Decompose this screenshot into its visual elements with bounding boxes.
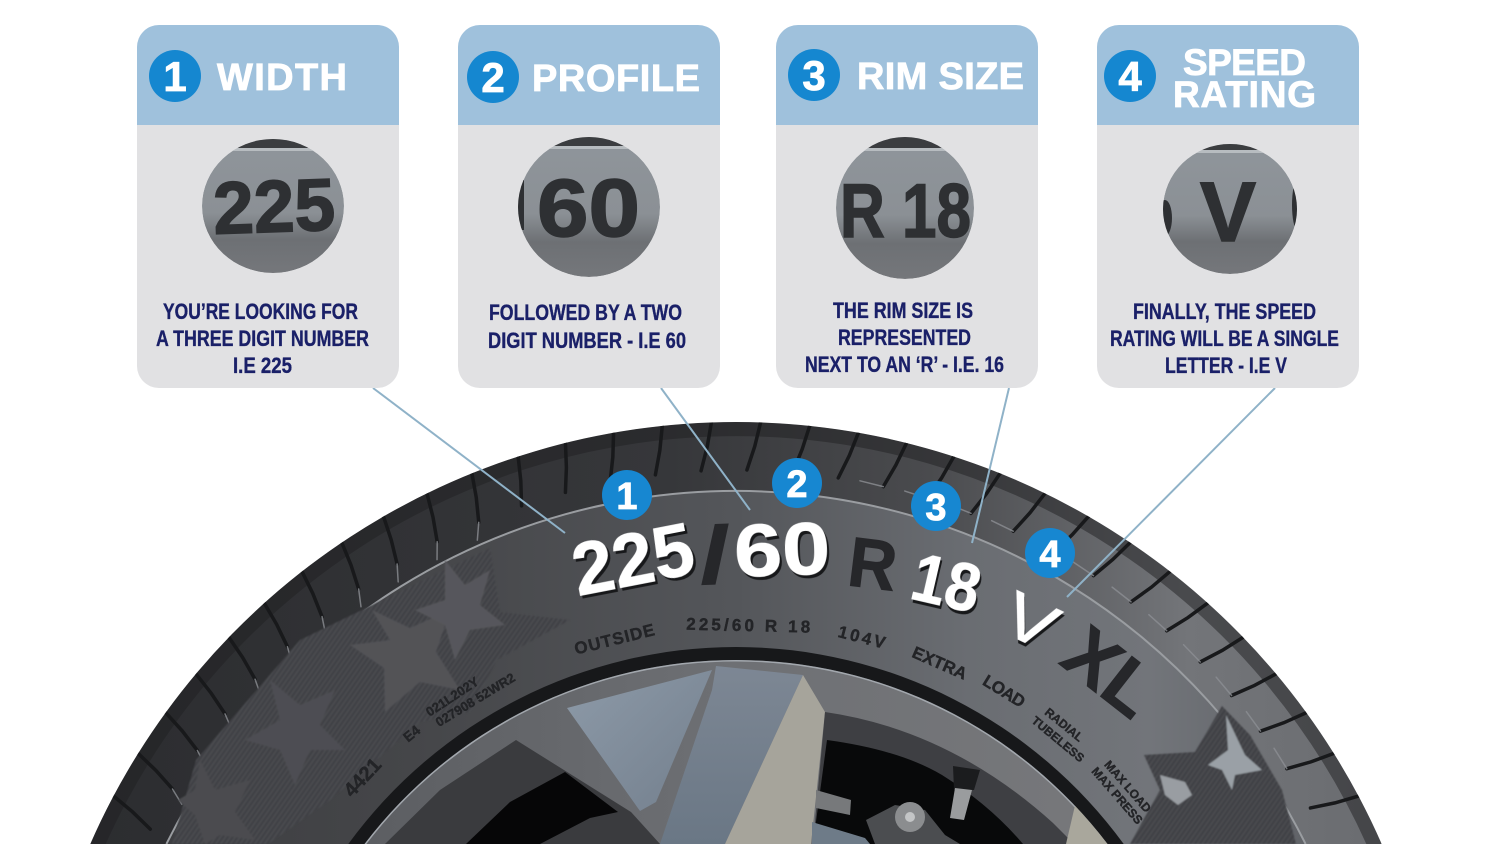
photo: 60: 60 — [537, 163, 640, 254]
panel: width — [137, 25, 399, 388]
number badge 3: 3 — [802, 52, 826, 99]
raised sidewall size markings: V — [992, 577, 1070, 665]
small sidewall markings: EXTRA — [909, 643, 970, 684]
raised sidewall size markings — [565, 507, 1174, 734]
number badge 2 — [467, 51, 519, 103]
description: speed rating: FINALLY, THE SPEED — [1133, 299, 1316, 324]
heading: speed rating: SPEED — [1183, 42, 1306, 83]
rim bead ring — [348, 647, 1124, 844]
heading: width: WIDTH — [217, 57, 347, 99]
description: profile — [488, 300, 686, 353]
small sidewall markings: E4 — [400, 722, 423, 745]
description: speed rating: LETTER - I.E V — [1165, 353, 1287, 378]
photo: R 18: R 18 — [840, 169, 971, 254]
photo: R 18 — [834, 136, 976, 279]
raised sidewall size markings: R — [844, 522, 901, 606]
right inner band — [813, 712, 1074, 844]
description: width: YOU’RE LOOKING FOR — [163, 299, 358, 324]
central spoke — [660, 666, 803, 844]
number badge 1 — [149, 50, 201, 102]
small sidewall markings: 104V — [836, 622, 888, 653]
tyre badge 2 — [772, 458, 822, 508]
description: rim size — [805, 298, 1004, 377]
description: speed rating — [1110, 299, 1339, 378]
tyre badge 1: 1 — [616, 476, 638, 518]
photo: 225: 225 — [212, 163, 336, 250]
left window — [385, 740, 660, 844]
description: profile: FOLLOWED BY A TWO — [489, 300, 682, 325]
description: rim size: NEXT TO AN ‘R’ - I.E. 16 — [805, 352, 1004, 377]
raised sidewall size markings: 225 — [565, 507, 701, 612]
raised sidewall size markings: XL — [1048, 610, 1174, 734]
tyre badge 2: 2 — [786, 464, 808, 506]
small sidewall markings: 225/60 R 18 — [686, 615, 810, 637]
panel: speed rating — [1097, 25, 1359, 388]
tread grooves — [98, 422, 1374, 844]
tyre and wheel photo — [90, 422, 1382, 844]
description: rim size: THE RIM SIZE IS — [833, 298, 973, 323]
leader lines — [373, 388, 1275, 597]
right window — [813, 740, 1023, 844]
silver spoke facet — [725, 675, 825, 844]
tyre badge 4 — [1025, 528, 1075, 578]
heading: speed rating: RATING — [1173, 74, 1316, 115]
description: rim size: REPRESENTED — [838, 325, 971, 350]
tyre sidewall — [166, 491, 1306, 844]
brake parts — [812, 790, 960, 844]
number badge 3 — [788, 49, 840, 101]
number badge 2: 2 — [481, 54, 505, 101]
tyre badge 3: 3 — [925, 487, 947, 529]
star pattern left — [172, 548, 570, 844]
tyre badge 1 — [602, 470, 652, 520]
small sidewall markings: MAX LOAD — [1101, 758, 1154, 815]
panel: rim size — [776, 25, 1038, 388]
small sidewall markings: 027908 52WR2 — [433, 670, 518, 730]
alloy wheel — [364, 660, 1140, 844]
description: width: A THREE DIGIT NUMBER — [156, 326, 369, 351]
small sidewall markings: TUBELESS — [1029, 713, 1087, 765]
photo: V — [1158, 143, 1302, 274]
small sidewall markings: 021L202Y — [423, 674, 482, 719]
star pattern right — [1130, 706, 1296, 844]
number badge 4 — [1104, 50, 1156, 102]
small sidewall markings: 4421 — [340, 754, 386, 802]
small sidewall markings: MAX PRESS — [1089, 764, 1146, 827]
description: profile: DIGIT NUMBER - I.E 60 — [488, 328, 686, 353]
description: width — [156, 299, 369, 378]
blue facet — [567, 670, 712, 811]
raised sidewall size markings: 60 — [733, 507, 831, 593]
raised sidewall size markings: 18 — [905, 539, 988, 628]
photo: 225 — [200, 138, 346, 273]
valve stem — [950, 766, 980, 820]
raised sidewall size markings: / — [698, 510, 732, 600]
number badge 1: 1 — [163, 53, 187, 100]
heading: speed rating — [1173, 42, 1316, 115]
small sidewall markings: RADIAL — [1042, 705, 1086, 745]
panel: profile — [458, 25, 720, 388]
description: speed rating: RATING WILL BE A SINGLE — [1110, 326, 1339, 351]
small sidewall markings — [340, 615, 1154, 827]
tyre badge 3 — [911, 481, 961, 531]
heading: profile: PROFILE — [532, 58, 700, 100]
description: width: I.E 225 — [233, 353, 292, 378]
heading: rim size: RIM SIZE — [857, 56, 1024, 98]
tyre badge 4: 4 — [1039, 534, 1061, 576]
photo: V: V — [1200, 165, 1256, 259]
small sidewall markings: OUTSIDE — [572, 620, 657, 659]
photo: 60 — [516, 135, 662, 277]
tyre tread — [90, 422, 1382, 844]
number badge 4: 4 — [1118, 53, 1142, 100]
right spoke — [1066, 806, 1108, 844]
small sidewall markings: LOAD — [979, 671, 1029, 711]
